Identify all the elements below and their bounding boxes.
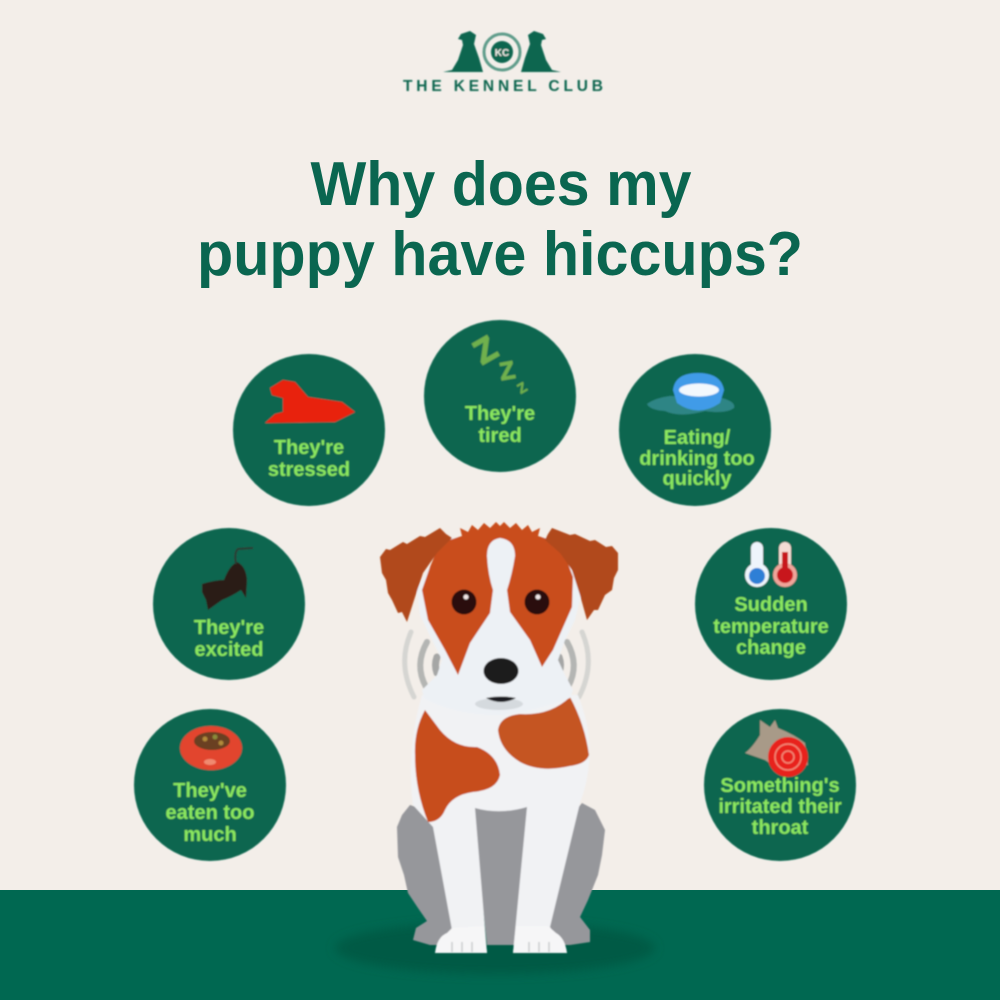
label: They're <box>274 437 344 459</box>
label: drinking too <box>639 448 755 470</box>
title <box>197 150 803 289</box>
label: They've <box>173 780 247 802</box>
label: much <box>183 824 237 846</box>
panel: eating or drinking too quickly <box>619 354 771 506</box>
eyes <box>452 590 550 614</box>
icon: logo emblem: KC <box>495 48 509 59</box>
mouth <box>475 696 523 710</box>
panel: they're excited <box>153 528 305 680</box>
logo wordmark: THE KENNEL CLUB <box>403 78 603 95</box>
icon: hot thermometer <box>773 542 797 587</box>
label: change <box>736 637 806 659</box>
chest patch left <box>415 710 500 822</box>
label: Something's <box>720 775 840 797</box>
logo: The Kennel Club <box>403 31 603 95</box>
ground band <box>0 890 1000 1000</box>
left ear <box>380 528 452 622</box>
panel: they're stressed <box>233 354 385 506</box>
nose <box>484 658 518 684</box>
icon: logo emblem <box>484 34 520 70</box>
label: stressed <box>268 459 350 481</box>
panel: something's irritated their throat <box>704 709 856 861</box>
torso and front legs <box>411 695 590 953</box>
illustration: puppy <box>380 522 618 953</box>
ground shadow <box>335 922 655 974</box>
panel: they're tired <box>424 320 576 472</box>
label: They're <box>194 617 264 639</box>
title: Why does my <box>310 150 692 219</box>
icon: water bowl <box>647 373 734 414</box>
icon: left logo dog <box>443 31 483 72</box>
icon: right logo dog <box>521 31 561 72</box>
label: quickly <box>663 468 732 490</box>
panel: sudden temperature change <box>695 528 847 680</box>
label: excited <box>195 639 263 661</box>
title: puppy have hiccups? <box>197 220 803 289</box>
icon: zzz: Z <box>497 356 517 386</box>
icon: zzz: Z <box>514 378 530 397</box>
paws <box>435 926 567 953</box>
icon: zzz: Z <box>467 329 504 372</box>
label: tired <box>478 425 522 447</box>
label: eaten too <box>166 802 254 824</box>
face patch left <box>422 522 500 675</box>
head <box>417 528 582 715</box>
label: irritated their <box>718 796 842 818</box>
back legs <box>397 803 605 945</box>
label: Eating/ <box>664 427 730 449</box>
icon: red lying dog <box>265 380 355 423</box>
icon: dog head with irritated throat <box>745 720 808 777</box>
label: throat <box>752 817 809 839</box>
label: Sudden <box>734 594 808 616</box>
label: temperature <box>713 616 829 638</box>
hiccup sound waves <box>405 632 588 697</box>
chest patch right <box>498 697 589 769</box>
label: They're <box>465 403 535 425</box>
icon: cold thermometer <box>745 542 769 587</box>
panel: they've eaten too much <box>134 709 286 861</box>
face patch right <box>500 522 573 667</box>
icon: zzz <box>467 329 530 397</box>
icon: black playful dog <box>202 548 253 610</box>
right ear <box>545 528 618 620</box>
icon: red food bowl <box>180 726 242 770</box>
